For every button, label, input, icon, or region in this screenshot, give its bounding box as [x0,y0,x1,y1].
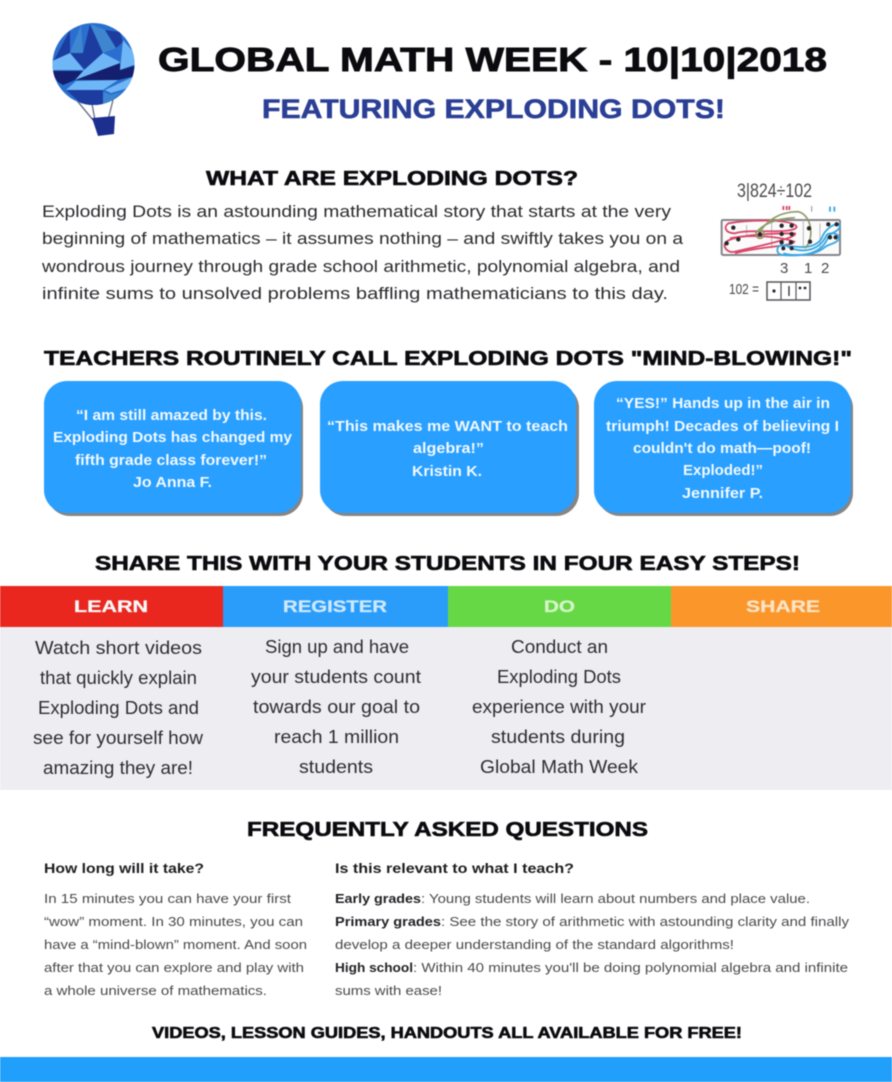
text block: description: infinite sums to unsolved problems baffling mathematicians to this day. [42,284,668,303]
faq: how long will it take: How long will it take? [44,860,204,876]
column: learn: Exploding Dots and [38,698,199,718]
panel: quote Kristin K.: “This makes me WANT to teach [327,419,568,435]
panel: quote Kristin K. [320,381,579,516]
panel: quote Jennifer P.: “YES!” Hands up in the air in [616,396,830,412]
panel: quote Jennifer P.: triumph! Decades of believing I [606,419,839,435]
column: learn: that quickly explain [40,668,197,688]
faq: is this relevant: : See the story of arithmetic with astounding clarity and finally [441,915,850,929]
panel: quote Jo Anna F.: Jo Anna F. [133,475,212,491]
column: do: DO [544,597,575,616]
column: register: towards our goal to [253,697,420,717]
column: register: your students count [251,667,421,687]
heading: faq: FREQUENTLY ASKED QUESTIONS [247,819,648,841]
column: register: students [299,757,373,777]
faq: is this relevant: Is this relevant to what I teach? [335,860,574,876]
panel: quote Kristin K.: Kristin K. [412,464,482,480]
column: do: students during [491,727,625,747]
column: share [671,586,892,627]
icon: hand-drawn exploding dots sketch: 3 [780,260,788,277]
faq: is this relevant: Primary grades [335,915,441,929]
text block: description: Exploding Dots is an astounding mathematical story that starts at the very [42,202,672,221]
column: share: SHARE [746,597,820,616]
faq: how long will it take: a whole universe of mathematics. [44,984,267,998]
column: learn: LEARN [74,597,148,616]
column: register: reach 1 million [274,727,399,747]
icon: hand-drawn exploding dots sketch: 3|824÷102 [737,181,812,202]
column: learn: see for yourself how [33,728,204,748]
icon: hand-drawn exploding dots sketch: 102 = [729,281,759,298]
faq: is this relevant: develop a deeper understanding of the standard algorithms! [335,938,734,952]
panel: quote Jennifer P.: couldn't do math—poof! [633,441,811,457]
column: do: Global Math Week [480,757,639,777]
heading: four easy steps: SHARE THIS WITH YOUR STUDENTS IN FOUR EASY STEPS! [95,553,800,575]
footer bar [0,1057,892,1082]
icon: hand-drawn exploding dots sketch: 2 [821,260,829,277]
text block: description: beginning of mathematics – it assumes nothing – and swiftly takes you on a [42,229,684,248]
panel: quote Jo Anna F.: “I am still amazed by this. [76,408,267,424]
column: register [223,586,448,777]
faq: is this relevant: : Within 40 minutes you'll be doing polynomial algebra and infinite [413,961,848,975]
column: do: Conduct an [511,637,608,657]
subtitle: FEATURING EXPLODING DOTS! [262,94,725,124]
panel: quote Jennifer P. [594,381,853,516]
faq: is this relevant: High school [335,961,413,975]
column: learn [0,586,223,778]
faq: how long will it take [44,860,307,998]
icon: hot air balloon [50,20,140,136]
faq: how long will it take: have a “mind-blown” moment. And soon [44,938,307,952]
column: do [448,586,671,777]
faq: is this relevant: sums with ease! [335,984,442,998]
heading: teachers quote: TEACHERS ROUTINELY CALL EXPLODING DOTS "MIND-BLOWING!" [44,348,852,370]
column: do: experience with your [472,697,646,717]
heading: what are exploding dots: WHAT ARE EXPLODING DOTS? [206,168,578,190]
faq: is this relevant: Early grades [335,892,421,906]
column: learn: amazing they are! [43,758,193,778]
icon: hand-drawn exploding dots sketch: 1 [804,260,812,277]
column: learn: Watch short videos [35,638,202,658]
faq: is this relevant: : Young students will learn about numbers and place value. [421,892,810,906]
faq: how long will it take: In 15 minutes you can have your first [44,892,292,906]
column: register: Sign up and have [265,637,409,657]
text block: description: wondrous journey through grade school arithmetic, polynomial algebra, and [41,257,680,276]
faq: how long will it take: after that you can explore and play with [44,961,304,975]
text block: description [41,202,684,303]
panel: quote Jennifer P.: Exploded!” [683,463,763,479]
panel: quote Kristin K.: algebra!” [413,441,484,457]
footer callout: VIDEOS, LESSON GUIDES, HANDOUTS ALL AVAILABLE FOR FREE! [152,1025,742,1042]
faq: is this relevant [335,860,850,998]
column: do: Exploding Dots [497,667,621,687]
panel: quote Jennifer P.: Jennifer P. [682,486,763,502]
panel: quote Jo Anna F. [44,381,303,516]
panel: steps background [0,627,892,790]
column: register: REGISTER [283,597,387,616]
icon: hand-drawn exploding dots sketch [722,181,840,300]
faq: how long will it take: “wow” moment. In 30 minutes, you can [44,915,303,929]
panel: quote Jo Anna F.: Exploding Dots has changed my [53,430,292,446]
panel: quote Jo Anna F.: fifth grade class forever!” [75,453,267,469]
title: GLOBAL MATH WEEK - 10|10|2018 [158,42,827,79]
